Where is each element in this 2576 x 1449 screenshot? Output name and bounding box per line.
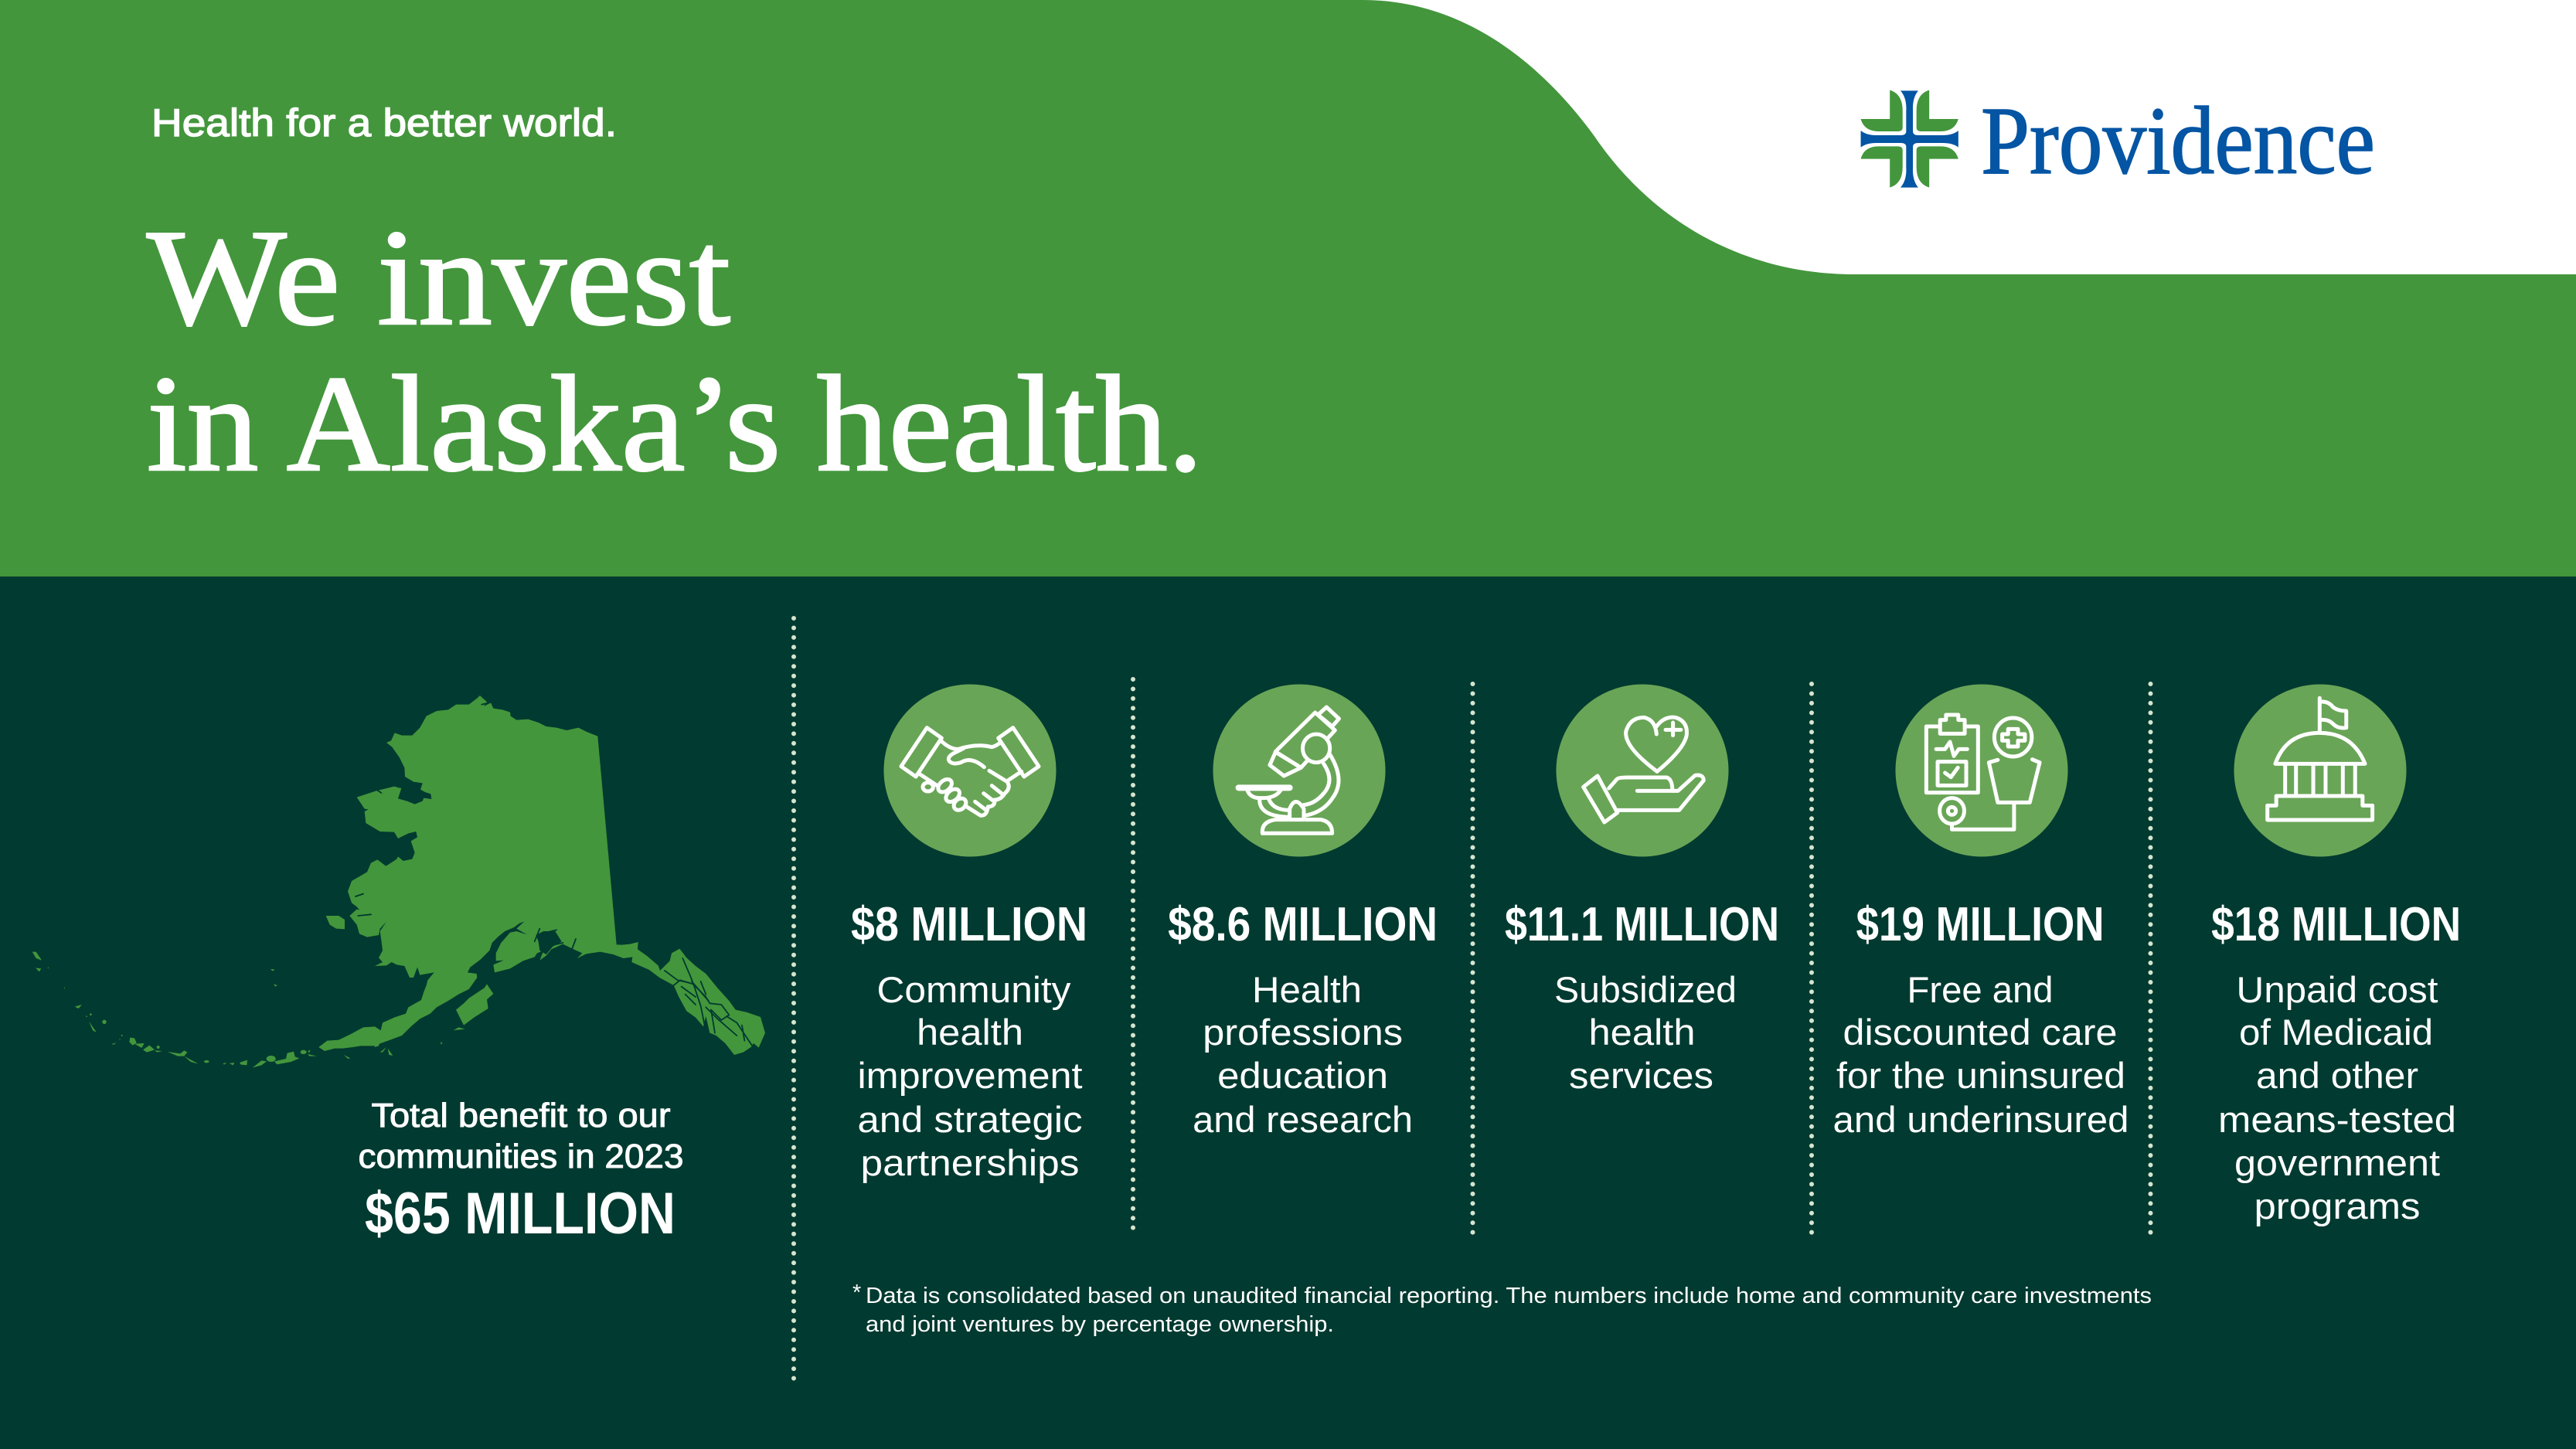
- description: services: [1569, 1055, 1713, 1096]
- total benefit text: $65 MILLION: [365, 1181, 675, 1247]
- description: and research: [1193, 1099, 1413, 1140]
- logo wordmark: Providence: [1981, 88, 2375, 195]
- description: programs: [2254, 1185, 2421, 1226]
- title: in Alaska’s health.: [147, 347, 1203, 500]
- stat: $8.6 million: $8.6 MILLION: [1168, 898, 1438, 951]
- column: health professions education: [1168, 685, 1438, 1140]
- total benefit text: [359, 1097, 683, 1247]
- description: health: [1589, 1012, 1696, 1053]
- icon: clipboard and stethoscope circle: [1895, 685, 2068, 856]
- description: [1193, 969, 1413, 1140]
- panel: dark green lower section: [0, 577, 2576, 1449]
- description: Community: [876, 969, 1071, 1010]
- logo: Providence: [1861, 88, 2375, 195]
- icon: Providence cross: [1861, 90, 1958, 188]
- panel: green header background: [0, 0, 2576, 577]
- Prince William Sound: [536, 931, 562, 954]
- description: means-tested: [2218, 1099, 2456, 1140]
- description: Free and: [1907, 969, 2053, 1010]
- description: of Medicaid: [2239, 1012, 2433, 1053]
- Aleutian Islands: [32, 952, 317, 1068]
- icon: heart in hand circle: [1557, 685, 1728, 856]
- description: and other: [2256, 1055, 2418, 1096]
- description: and underinsured: [1833, 1099, 2129, 1140]
- title: [147, 201, 1203, 500]
- fjords: [665, 958, 752, 1046]
- tagline: Health for a better world.: [151, 101, 617, 145]
- description: government: [2234, 1142, 2440, 1183]
- stat: $19 million: $19 MILLION: [1856, 898, 2104, 951]
- description: [858, 969, 1082, 1183]
- description: health: [917, 1012, 1023, 1053]
- description: professions: [1203, 1012, 1403, 1053]
- column: subsidized health services: [1505, 685, 1779, 1096]
- icon: microscope circle: [1213, 685, 1385, 856]
- description: [1554, 969, 1737, 1096]
- description: Subsidized: [1554, 969, 1737, 1010]
- column: unpaid cost of Medicaid: [2211, 685, 2461, 1226]
- footnote: and joint ventures by percentage ownership.: [866, 1312, 1334, 1337]
- description: improvement: [858, 1055, 1082, 1096]
- description: discounted care: [1843, 1012, 2118, 1053]
- description: [1833, 969, 2129, 1140]
- description: Unpaid cost: [2237, 969, 2438, 1010]
- description: for the uninsured: [1836, 1055, 2125, 1096]
- total benefit text: communities in 2023: [359, 1138, 683, 1175]
- title: We invest: [147, 201, 730, 354]
- description: Health: [1252, 969, 1362, 1010]
- footnote: Data is consolidated based on unaudited financial reporting. The numbers include home and community care investments: [866, 1284, 2152, 1308]
- column: community health improvement: [851, 685, 1087, 1183]
- description: [2218, 969, 2456, 1226]
- stat: $11.1 million: $11.1 MILLION: [1505, 898, 1779, 951]
- panel: white logo corner curve: [1363, 0, 2576, 274]
- footnote: [852, 1281, 2152, 1337]
- total benefit text: Total benefit to our: [371, 1097, 671, 1134]
- icon: capitol building circle: [2234, 685, 2407, 856]
- description: partnerships: [861, 1142, 1079, 1183]
- footnote: *: [852, 1281, 861, 1305]
- icon: handshake circle: [884, 685, 1056, 856]
- description: education: [1217, 1055, 1388, 1096]
- stat: $18 million: $18 MILLION: [2211, 898, 2461, 951]
- description: and strategic: [858, 1099, 1082, 1140]
- map: Alaska: [32, 696, 765, 1068]
- stat: $8 million: $8 MILLION: [851, 898, 1087, 951]
- column: free and discounted care: [1833, 685, 2129, 1140]
